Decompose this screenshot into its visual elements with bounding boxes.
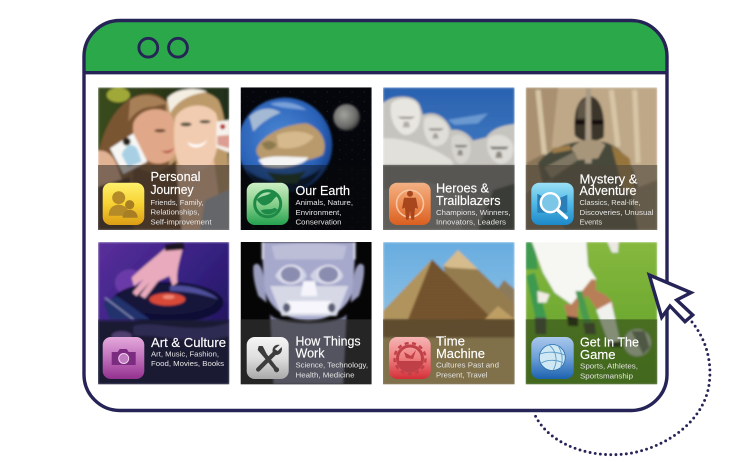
description: Sports, Athletes, <box>580 362 638 371</box>
description: Events <box>580 218 602 226</box>
heading <box>150 169 201 197</box>
heading: Time <box>436 333 465 348</box>
photo: hand on turntable <box>98 242 229 384</box>
photo: two girls <box>98 87 229 230</box>
panel: Mystery & Adventure <box>526 87 657 230</box>
caption band <box>383 319 515 384</box>
description: Friends, Family, <box>150 198 204 207</box>
photo: soccer player <box>526 242 657 384</box>
icon: basketball <box>531 337 574 379</box>
heading: Get In The <box>580 335 639 350</box>
heading: Game <box>580 347 616 362</box>
heading <box>580 335 639 362</box>
icon: gear clock <box>389 337 431 379</box>
title bar <box>84 20 667 72</box>
description: Classics, Real-life, <box>580 198 640 207</box>
description: Environment, <box>296 208 342 217</box>
caption band <box>241 165 372 230</box>
description <box>150 198 212 226</box>
heading <box>436 333 485 361</box>
description: Science, Technology, <box>296 361 368 370</box>
description <box>296 198 353 226</box>
heading: Heroes & <box>436 181 489 196</box>
heading <box>580 172 638 198</box>
icon: cursor arrow <box>649 275 693 322</box>
heading: How Things <box>296 333 361 348</box>
photo: x-ray skull <box>241 242 372 384</box>
panel: Time Machine <box>383 242 515 384</box>
heading: Our Earth <box>296 183 350 198</box>
photo: pyramids <box>383 242 515 384</box>
icon: people <box>103 183 144 225</box>
heading <box>436 181 501 208</box>
icon: camera <box>103 337 144 379</box>
photo: knight with sword <box>526 87 657 230</box>
description: Relationships, <box>150 208 200 217</box>
icon: globe <box>247 183 289 225</box>
description: Art, Music, Fashion, <box>151 350 219 359</box>
description: Food, Movies, Books <box>151 359 224 368</box>
caption band <box>98 319 229 384</box>
description: Health, Medicine <box>296 371 354 380</box>
window button right <box>169 38 187 57</box>
heading: Mystery & <box>580 172 638 186</box>
heading: Journey <box>150 182 194 197</box>
description: Sportsmanship <box>580 372 633 381</box>
panel: How Things Work <box>241 242 372 384</box>
caption band <box>241 319 372 384</box>
caption band <box>526 165 657 230</box>
panel: Personal Journey <box>98 87 229 230</box>
photo: Mount Rushmore <box>383 87 515 230</box>
window body <box>84 20 667 410</box>
heading: Machine <box>436 346 485 361</box>
arrow: dotted curve <box>534 322 710 455</box>
heading: Art & Culture <box>151 335 226 350</box>
description <box>580 198 654 226</box>
heading: Adventure <box>580 183 636 198</box>
window button left <box>139 38 158 57</box>
description: Discoveries, Unusual <box>580 208 654 217</box>
browser frame <box>84 20 667 410</box>
photo: earth and moon <box>238 87 372 230</box>
description <box>296 361 368 380</box>
heading <box>296 333 361 361</box>
description: Conservation <box>296 218 342 226</box>
description: Innovators, Leaders <box>436 218 506 226</box>
icon: magnifier <box>531 183 574 225</box>
heading: Trailblazers <box>436 193 501 208</box>
description <box>436 208 510 226</box>
icon: tools <box>247 337 289 379</box>
description: Present, Travel <box>436 371 488 380</box>
caption band <box>526 319 657 384</box>
description <box>436 361 499 380</box>
title bar divider <box>84 71 667 74</box>
panel: Our Earth <box>238 87 372 230</box>
panel: Get In The Game <box>526 242 657 384</box>
icon: hero figure <box>389 183 431 225</box>
panel: Heroes & Trailblazers <box>383 87 515 230</box>
description: Animals, Nature, <box>296 198 353 207</box>
description: Champions, Winners, <box>436 208 510 217</box>
panel: Art & Culture <box>98 242 229 384</box>
description: Self-improvement <box>150 218 212 226</box>
caption band <box>98 165 229 230</box>
heading: Personal <box>150 169 201 184</box>
description: Cultures Past and <box>436 361 499 370</box>
infographic: browser window <box>82 18 712 456</box>
heading: Work <box>296 346 325 361</box>
description <box>580 362 638 381</box>
description <box>151 350 224 368</box>
caption band <box>383 165 515 230</box>
window outline <box>84 20 667 410</box>
